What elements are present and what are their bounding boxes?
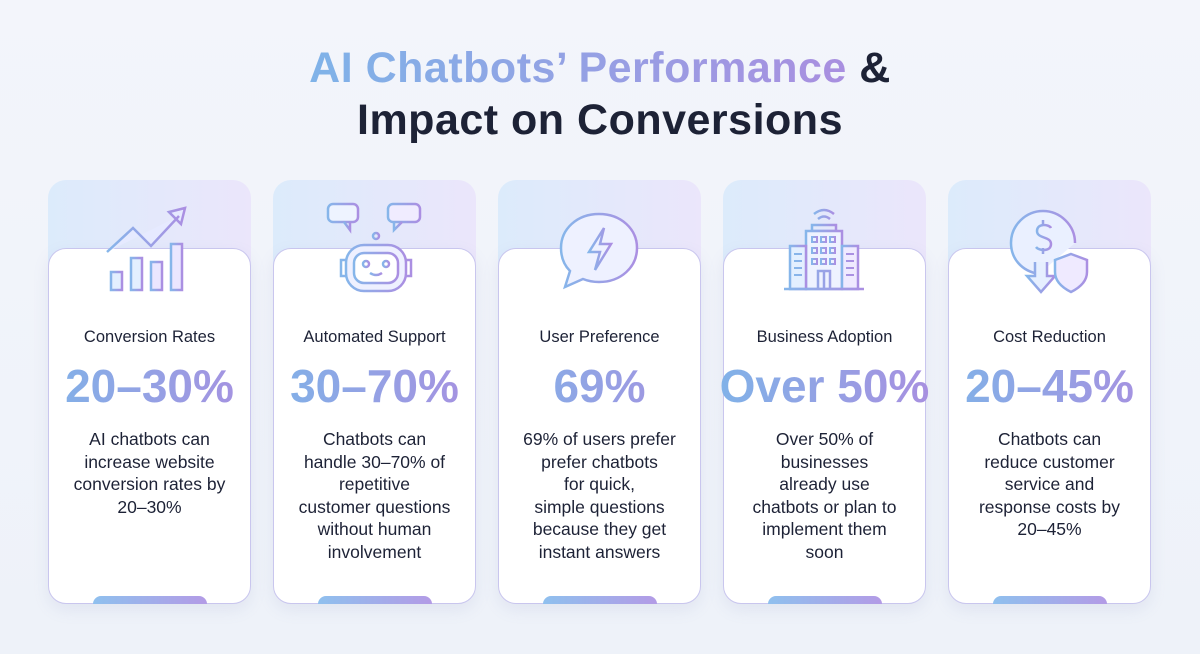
description: 20–45% (1017, 519, 1082, 539)
description: handle 30–70% of (304, 452, 445, 472)
description: because they get (533, 519, 666, 539)
description: soon (806, 542, 843, 562)
description: prefer chatbots (541, 452, 658, 472)
description: without human (318, 519, 431, 539)
description: AI chatbots can (89, 429, 210, 449)
description: Chatbots can (323, 429, 426, 449)
description: simple questions (534, 496, 665, 516)
description: 20–30% (117, 496, 182, 516)
stat (488, 358, 711, 414)
description: customer questions (299, 496, 450, 516)
heading: Automated Support (303, 328, 446, 346)
icon: chart (106, 206, 187, 292)
title: Impact on Conversions (357, 96, 843, 144)
description: reduce customer (984, 452, 1115, 472)
description: increase website (84, 452, 215, 472)
description (752, 429, 896, 562)
description: response costs by (979, 496, 1120, 516)
description: Chatbots can (998, 429, 1101, 449)
description (979, 429, 1120, 539)
title (309, 44, 891, 144)
heading: Conversion Rates (84, 328, 215, 346)
description: instant answers (539, 542, 660, 562)
icon: speech bubble with lightning (560, 212, 638, 290)
panel: user preference (498, 180, 701, 609)
description: Over 50% of (776, 429, 873, 449)
stat: 69% (553, 360, 646, 412)
description (74, 429, 226, 516)
heading: Cost Reduction (993, 328, 1106, 346)
heading: Business Adoption (757, 328, 892, 346)
title: AI Chatbots’ Performance & (309, 44, 891, 92)
description: repetitive (339, 474, 410, 494)
description: implement them (762, 519, 887, 539)
description: businesses (781, 452, 868, 472)
stat: 20–45% (965, 360, 1134, 412)
description (523, 429, 676, 562)
panel: conversion rates (48, 180, 251, 609)
icon: robot (326, 202, 422, 292)
icon: building (784, 208, 864, 290)
stat: 20–30% (65, 360, 234, 412)
icon: dollar with shield (1010, 210, 1088, 294)
description: for quick, (564, 474, 635, 494)
description: involvement (328, 542, 421, 562)
stat: Over 50% (720, 360, 929, 412)
heading: User Preference (539, 328, 660, 346)
panel: cost reduction (948, 180, 1151, 609)
panel: automated support (273, 180, 476, 609)
stat: 30–70% (290, 360, 459, 412)
description: 69% of users prefer (523, 429, 676, 449)
description: service and (1005, 474, 1094, 494)
description: already use (779, 474, 870, 494)
description (299, 429, 450, 562)
description: conversion rates by (74, 474, 225, 494)
description: chatbots or plan to (752, 496, 896, 516)
panel: business adoption (720, 180, 929, 609)
